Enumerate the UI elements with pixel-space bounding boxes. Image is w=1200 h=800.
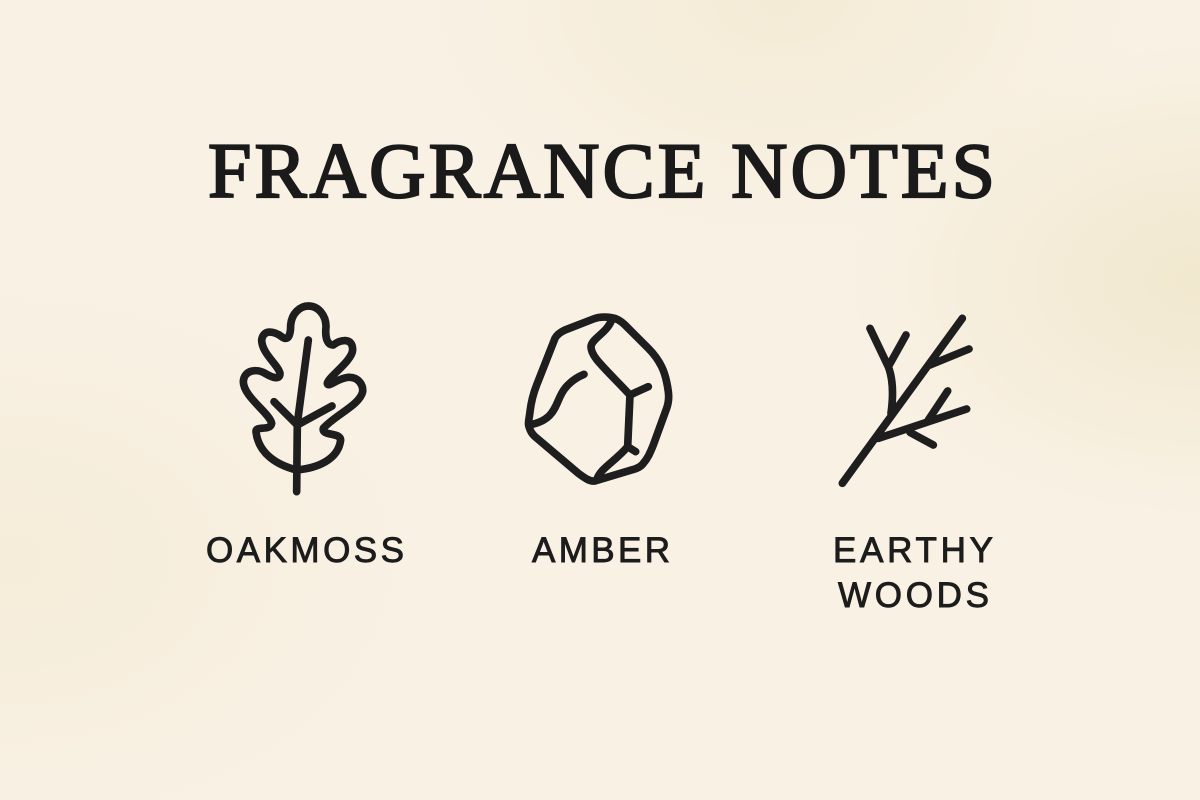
label: earthy woods: EARTHY bbox=[833, 531, 993, 570]
icon: amber stone bbox=[528, 317, 669, 481]
label: amber: AMBER bbox=[532, 531, 670, 570]
icon: twig bbox=[842, 318, 969, 483]
icon: oak leaf bbox=[243, 306, 363, 492]
label: earthy woods: WOODS bbox=[838, 576, 989, 615]
title: FRAGRANCE NOTES bbox=[208, 127, 995, 214]
label: earthy woods bbox=[833, 531, 993, 615]
label: oakmoss: OAKMOSS bbox=[206, 531, 404, 570]
